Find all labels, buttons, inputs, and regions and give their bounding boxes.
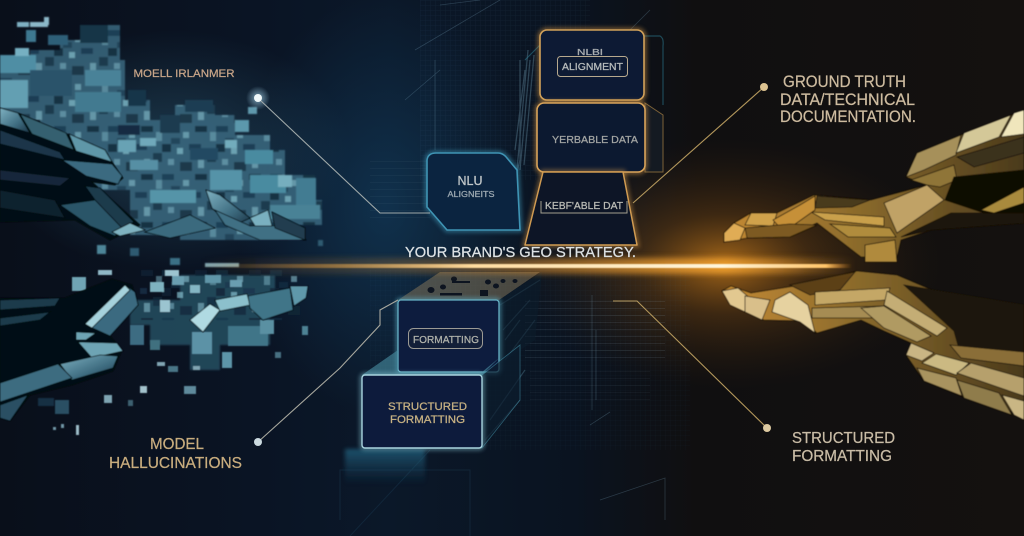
heading: your brand's geo strategy: YOUR BRAND'S GEO STRATEGY. — [405, 244, 636, 261]
label: model hallucinations: HALLUCINATIONS — [109, 455, 242, 472]
connector: top left — [246, 86, 430, 213]
icon: blue robotic arm, lower — [0, 279, 308, 421]
alignments label: ALIGNEITS — [448, 189, 495, 199]
label: ground truth data: DOCUMENTATION. — [780, 107, 916, 126]
label: model hallucinations — [109, 436, 242, 472]
panel: stacked gold block middle — [537, 103, 663, 172]
label: model hallucinations: MODEL — [150, 436, 204, 453]
panel: structured formatting block — [362, 345, 520, 448]
panel: blue NLU block — [427, 153, 520, 230]
label: model irlanmer: MOELL IRLANMER — [134, 68, 235, 80]
alignment label pill: ALIGNMENT — [562, 61, 624, 73]
panel: stacked gold block top — [525, 30, 663, 105]
icon: blue robotic arm, upper — [0, 108, 306, 240]
connector: top right — [633, 83, 768, 203]
formatting pill — [408, 328, 482, 348]
verifiable data label: YERBABLE DATA — [552, 134, 638, 146]
label: structured formatting: FORMATTING — [792, 448, 892, 465]
label: ground truth data: DATA/TECHNICAL — [780, 90, 915, 109]
pixel dissolve cloud: upper left — [0, 17, 323, 267]
verifiable data label boxed: KEBF'ABLE DAT — [545, 201, 623, 212]
label: ground truth data: GROUND TRUTH — [783, 72, 906, 91]
label: structured formatting — [792, 430, 895, 465]
nlu label small: NLBI — [577, 48, 603, 57]
icon: gold robotic arm, lower — [722, 271, 1024, 420]
panel: stacked gold block lower — [525, 172, 637, 245]
nlu label: NLU — [458, 174, 482, 188]
formatting label: FORMATTING — [390, 414, 465, 426]
panel: formatting block — [398, 272, 542, 372]
label: structured formatting: STRUCTURED — [792, 430, 895, 447]
icon: gold robotic arm, upper — [724, 110, 1024, 262]
formatting pill: FORMATTING — [413, 334, 479, 346]
label: ground truth data — [780, 72, 916, 126]
structured label: STRUCTURED — [388, 401, 467, 413]
pixel dissolve cloud: lower left — [38, 270, 308, 435]
connector: bottom right — [613, 301, 771, 432]
chip details — [428, 276, 518, 296]
circuit grid backdrop — [340, 0, 690, 536]
connector: bottom left — [254, 300, 398, 446]
light beam — [200, 258, 855, 274]
